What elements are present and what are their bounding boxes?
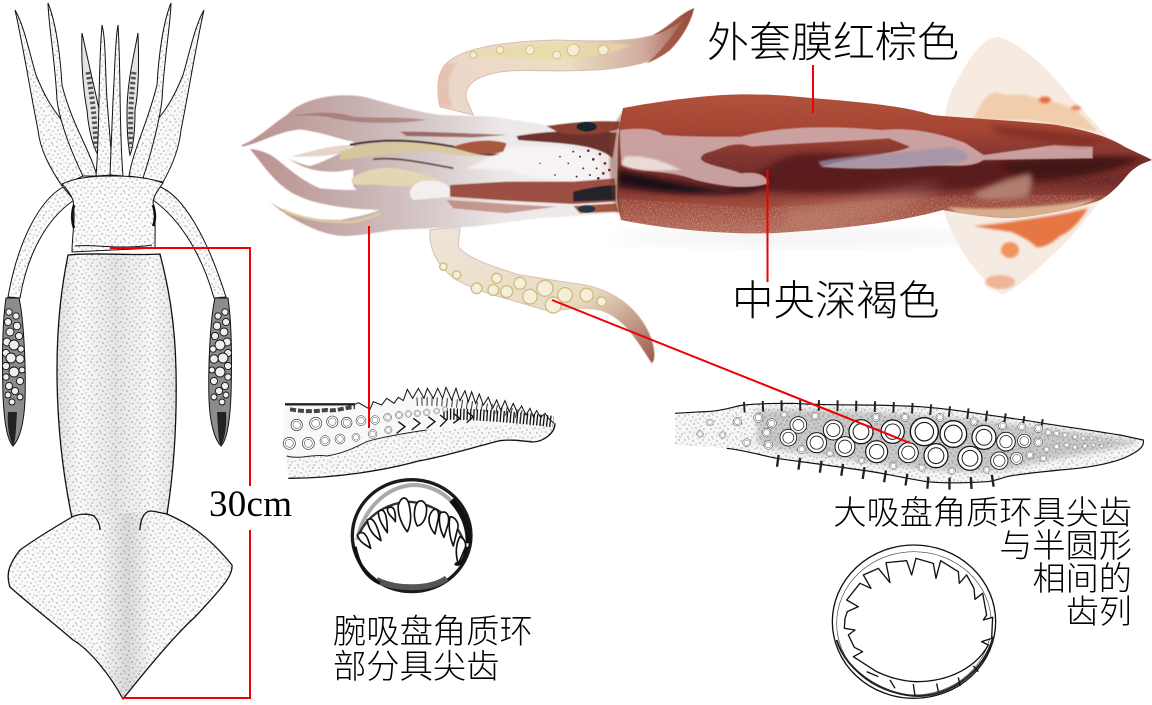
arm leader: [368, 226, 370, 428]
label: mantle colour: 外套膜红棕色: [707, 19, 959, 66]
30cm measure upper bracket: [110, 248, 250, 486]
dark pigment patches: [517, 131, 617, 158]
30cm measure lower bracket: [122, 530, 250, 698]
head: [62, 176, 163, 252]
marginal ridges: [743, 405, 1043, 425]
arm C: [250, 149, 460, 210]
tentacle leader: [552, 300, 910, 443]
mantle edge shadow: [609, 110, 623, 213]
label: club sucker ring: 齿列: [1066, 594, 1132, 631]
illustration: tentacle club: [675, 403, 1144, 484]
red leader lines: [110, 65, 910, 698]
outer ring: [832, 545, 996, 698]
arm A: [242, 95, 507, 147]
suckers: [283, 407, 448, 449]
mantle colour line: [812, 65, 814, 113]
label: club sucker ring: 大吸盘角质环具尖齿: [833, 495, 1132, 532]
white head highlight: [410, 180, 453, 200]
label: arm sucker ring: [333, 614, 533, 686]
small pale arm tip: [290, 145, 353, 157]
lower tentacle: [430, 227, 654, 363]
dark sucker bed: [757, 410, 1140, 472]
mantle: [610, 90, 1152, 240]
suckers: [697, 411, 1133, 475]
upper tentacle: [438, 8, 694, 115]
illustration: arm club: [283, 387, 555, 478]
label: central colour: 中央深褐色: [732, 277, 940, 324]
dark central band: [612, 153, 1150, 193]
eye stripes: [547, 121, 620, 135]
label: club sucker ring: 与半圆形: [999, 528, 1132, 565]
photo: squid specimen: [242, 8, 1152, 363]
upper eye: [577, 122, 597, 131]
lower eye: [578, 205, 595, 213]
chevrons: [397, 412, 473, 433]
right tentacle: [153, 186, 232, 446]
arm outline: [284, 388, 555, 478]
marginal spines: [355, 387, 554, 423]
head base: [353, 115, 618, 230]
pale sheen: [619, 127, 1093, 187]
illustration: club sucker ring: [832, 545, 996, 698]
label: club sucker ring: [833, 495, 1132, 631]
arm D: [270, 197, 467, 236]
arm B: [288, 139, 513, 172]
mantle speckle: [617, 195, 1106, 234]
illustration: arm sucker ring: [352, 480, 471, 592]
teeth: [357, 498, 466, 564]
label: length: 30cm: [209, 484, 292, 525]
left arms: [15, 3, 113, 186]
mantle: [57, 254, 176, 520]
left tentacle: [2, 187, 74, 446]
soft shadow: [610, 230, 990, 246]
ring body: [352, 480, 471, 592]
label: club sucker ring: 相间的: [1032, 561, 1132, 598]
tooth comb: [443, 414, 553, 422]
central colour line: [766, 170, 768, 282]
label: arm sucker ring: 腕吸盘角质环: [333, 614, 533, 651]
toothed inner edge: [844, 558, 993, 682]
fins: [8, 511, 232, 699]
tail fins: [943, 37, 1110, 295]
lower membrane stipple: [287, 423, 555, 478]
right arms: [110, 3, 204, 182]
illustration: squid dorsal view: [2, 3, 232, 699]
club outline: [675, 403, 1144, 483]
pigment speckle: [539, 149, 611, 180]
teeth arch: [359, 502, 463, 540]
arms and head: [242, 95, 623, 236]
tail stripes: [947, 198, 1097, 219]
label: arm sucker ring: 部分具尖齿: [333, 649, 499, 686]
